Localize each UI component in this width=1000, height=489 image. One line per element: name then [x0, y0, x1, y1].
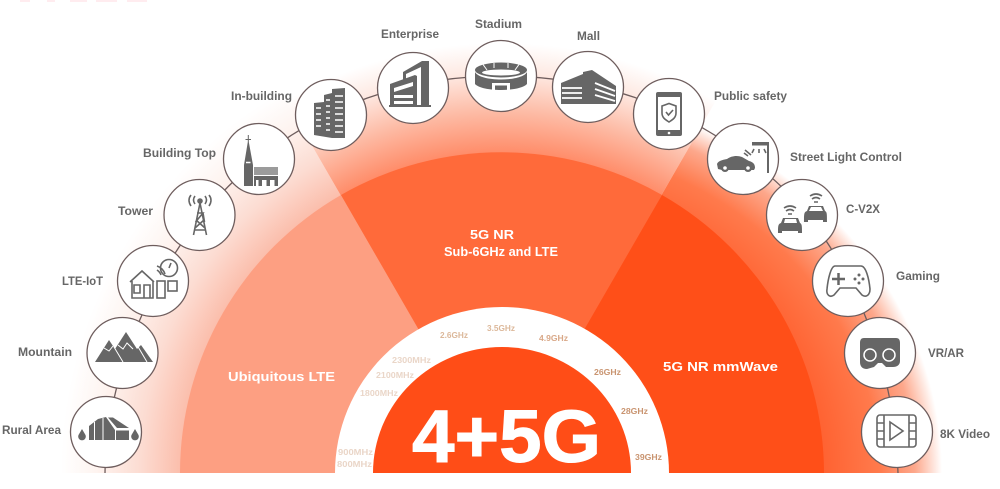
frequency labels: 2.6GHz: [440, 330, 468, 340]
label: Street Light Control: [790, 152, 902, 164]
icon: office towers: [389, 61, 431, 107]
label: 5G NR Sub-6GHz and LTE: Sub-6GHz and LTE: [444, 244, 558, 259]
frequency labels: 2300MHz: [392, 355, 431, 365]
frequency labels: 900MHz: [338, 447, 373, 457]
label: VR/AR: [928, 348, 965, 360]
label: Public safety: [714, 91, 788, 103]
icon: phone with shield: [656, 92, 682, 136]
node: Mall: [552, 31, 624, 122]
label: Rural Area: [2, 425, 62, 437]
label: C-V2X: [846, 204, 880, 216]
icon: mall building: [561, 70, 616, 104]
frequency labels: 26GHz: [594, 367, 621, 377]
node: Street Light Control: [708, 124, 902, 194]
glow: middle wedge: [261, 0, 741, 473]
frequency labels: 39GHz: [635, 452, 662, 462]
frequency labels: 1800MHz: [360, 388, 398, 398]
node: Public safety: [634, 78, 788, 150]
glow: left wedge: [21, 57, 501, 473]
icon: mountains: [95, 332, 153, 362]
panel: 5G NR mmWave sector: [502, 195, 824, 473]
title: 4+5G: 4+5G: [412, 395, 601, 478]
label: Stadium: [475, 19, 522, 31]
icon: connected cars: [778, 194, 827, 233]
label: Enterprise: [381, 29, 439, 41]
node: Gaming: [812, 246, 940, 316]
node: VR/AR: [844, 318, 965, 388]
label: In-building: [231, 91, 292, 103]
icon: cell tower: [189, 195, 211, 235]
panel: 5G NR Sub-6GHz sector: [341, 152, 662, 473]
node: Tower: [118, 180, 235, 250]
label: 5G NR Sub-6GHz and LTE: [444, 227, 558, 259]
frequency labels: 28GHz: [621, 406, 648, 416]
node: Building Top: [143, 124, 294, 194]
icon: stadium: [475, 62, 527, 91]
label: 5G NR Sub-6GHz and LTE: 5G NR: [470, 227, 515, 242]
frequency labels: 3.5GHz: [487, 323, 515, 333]
node: C-V2X: [766, 180, 880, 250]
label: Mall: [577, 31, 600, 43]
connector arc: [105, 76, 898, 473]
label: 5G NR mmWave: 5G NR mmWave: [663, 359, 778, 374]
panel: Ubiquitous LTE sector: [180, 195, 502, 473]
label: 8K Video: [940, 429, 990, 441]
label: LTE-IoT: [62, 276, 103, 288]
label: Tower: [118, 206, 154, 218]
label: Mountain: [18, 347, 72, 359]
node: LTE-IoT: [62, 246, 188, 316]
panel: central 4+5G dome: [373, 347, 631, 473]
node: In-building: [231, 80, 366, 150]
glow: right wedge: [501, 57, 981, 473]
node: Mountain: [18, 318, 158, 388]
icon: film with play button: [877, 415, 916, 447]
label: Building Top: [143, 148, 216, 160]
icon: game controller: [827, 266, 870, 296]
icon: VR headset: [860, 338, 900, 369]
label: Gaming: [896, 271, 940, 283]
icon: barn with water drops: [78, 417, 139, 440]
frequency labels: 4.9GHz: [539, 333, 568, 343]
frequency labels: 2100MHz: [376, 370, 414, 380]
icon: church: [244, 135, 278, 186]
node: 8K Video: [862, 396, 990, 468]
icon: high-rise: [314, 88, 345, 138]
label: Ubiquitous LTE: Ubiquitous LTE: [228, 369, 335, 384]
panel: white frequency ring: [335, 307, 669, 473]
node: Rural Area: [2, 396, 142, 468]
node: Stadium: [466, 19, 536, 112]
frequency labels: [337, 323, 662, 469]
icon: smart home: [130, 260, 178, 298]
frequency labels: 800MHz: [337, 459, 372, 469]
node: Enterprise: [378, 29, 448, 124]
icon: car and street light: [717, 142, 769, 173]
